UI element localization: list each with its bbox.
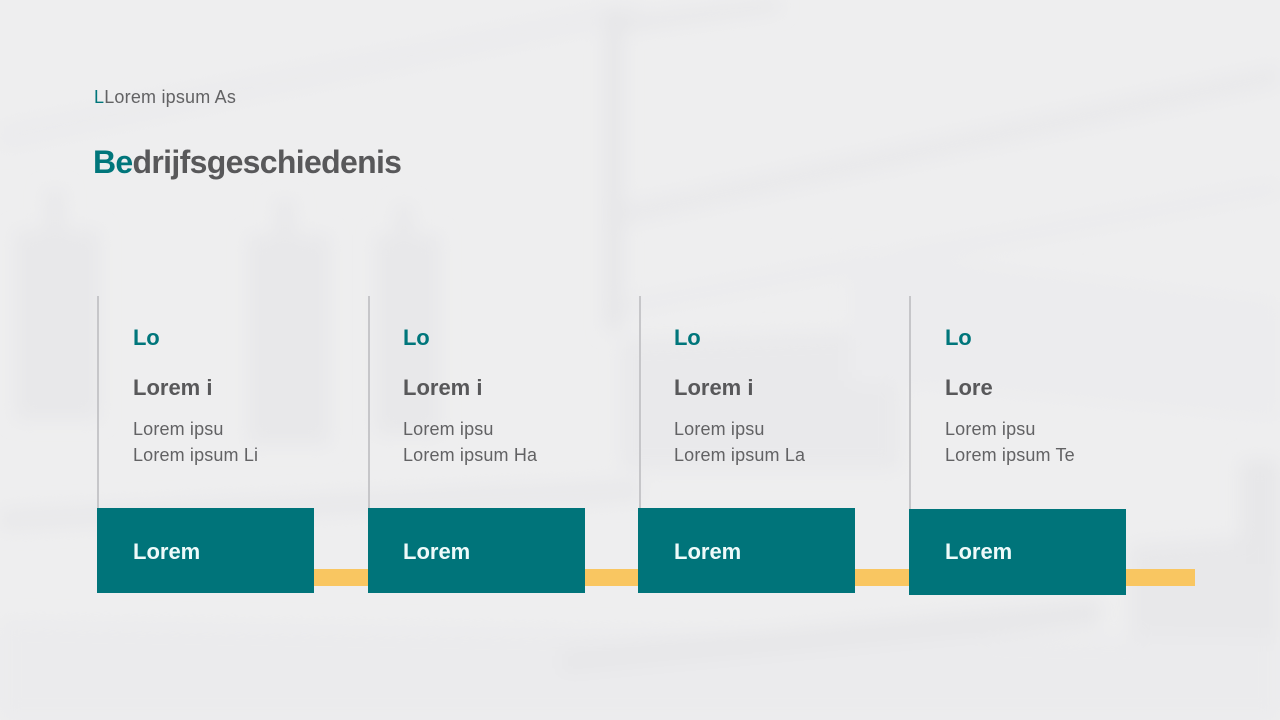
- milestone 2 body: Lorem ipsum Ha: [403, 445, 537, 465]
- milestone 4 heading: Lore: [945, 375, 993, 400]
- milestone 2 body: Lorem ipsu: [403, 419, 494, 439]
- milestone 2 date: Lo: [403, 325, 429, 350]
- title: Bedrijfsgeschiedenis: [93, 144, 401, 180]
- milestone 1 label box: [97, 508, 314, 593]
- milestone 4 date: Lo: [945, 325, 971, 350]
- milestone 3 date: Lo: [674, 325, 700, 350]
- milestone 4 body: [945, 419, 1075, 465]
- milestone 2 body: [403, 419, 537, 465]
- milestone 2 label box: [368, 508, 585, 593]
- milestone 4: [909, 296, 1126, 595]
- milestone 2: [368, 296, 585, 593]
- milestone 3 body: Lorem ipsu: [674, 419, 765, 439]
- milestone 1 body: [133, 419, 258, 465]
- milestone 1 body: Lorem ipsu: [133, 419, 224, 439]
- milestone 4 label box: Lorem: [945, 539, 1012, 564]
- milestone 4 body: Lorem ipsum Te: [945, 445, 1075, 465]
- milestone 3 body: Lorem ipsum La: [674, 445, 805, 465]
- eyebrow text: LLorem ipsum As: [94, 87, 236, 107]
- milestone 2 heading: Lorem i: [403, 375, 482, 400]
- milestone 1 heading: Lorem i: [133, 375, 212, 400]
- milestone 3 label box: [638, 508, 855, 593]
- milestone 1 date: Lo: [133, 325, 159, 350]
- milestone 3 body: [674, 419, 805, 465]
- milestone 1 label box: Lorem: [133, 539, 200, 564]
- milestone 3 heading: Lorem i: [674, 375, 753, 400]
- milestone 2 label box: Lorem: [403, 539, 470, 564]
- milestone 4 label box: [909, 509, 1126, 595]
- milestone 1: [97, 296, 314, 593]
- milestone 3: [638, 296, 855, 593]
- timeline bar: [314, 569, 1195, 586]
- milestone 1 body: Lorem ipsum Li: [133, 445, 258, 465]
- milestone 4 body: Lorem ipsu: [945, 419, 1036, 439]
- milestone 3 label box: Lorem: [674, 539, 741, 564]
